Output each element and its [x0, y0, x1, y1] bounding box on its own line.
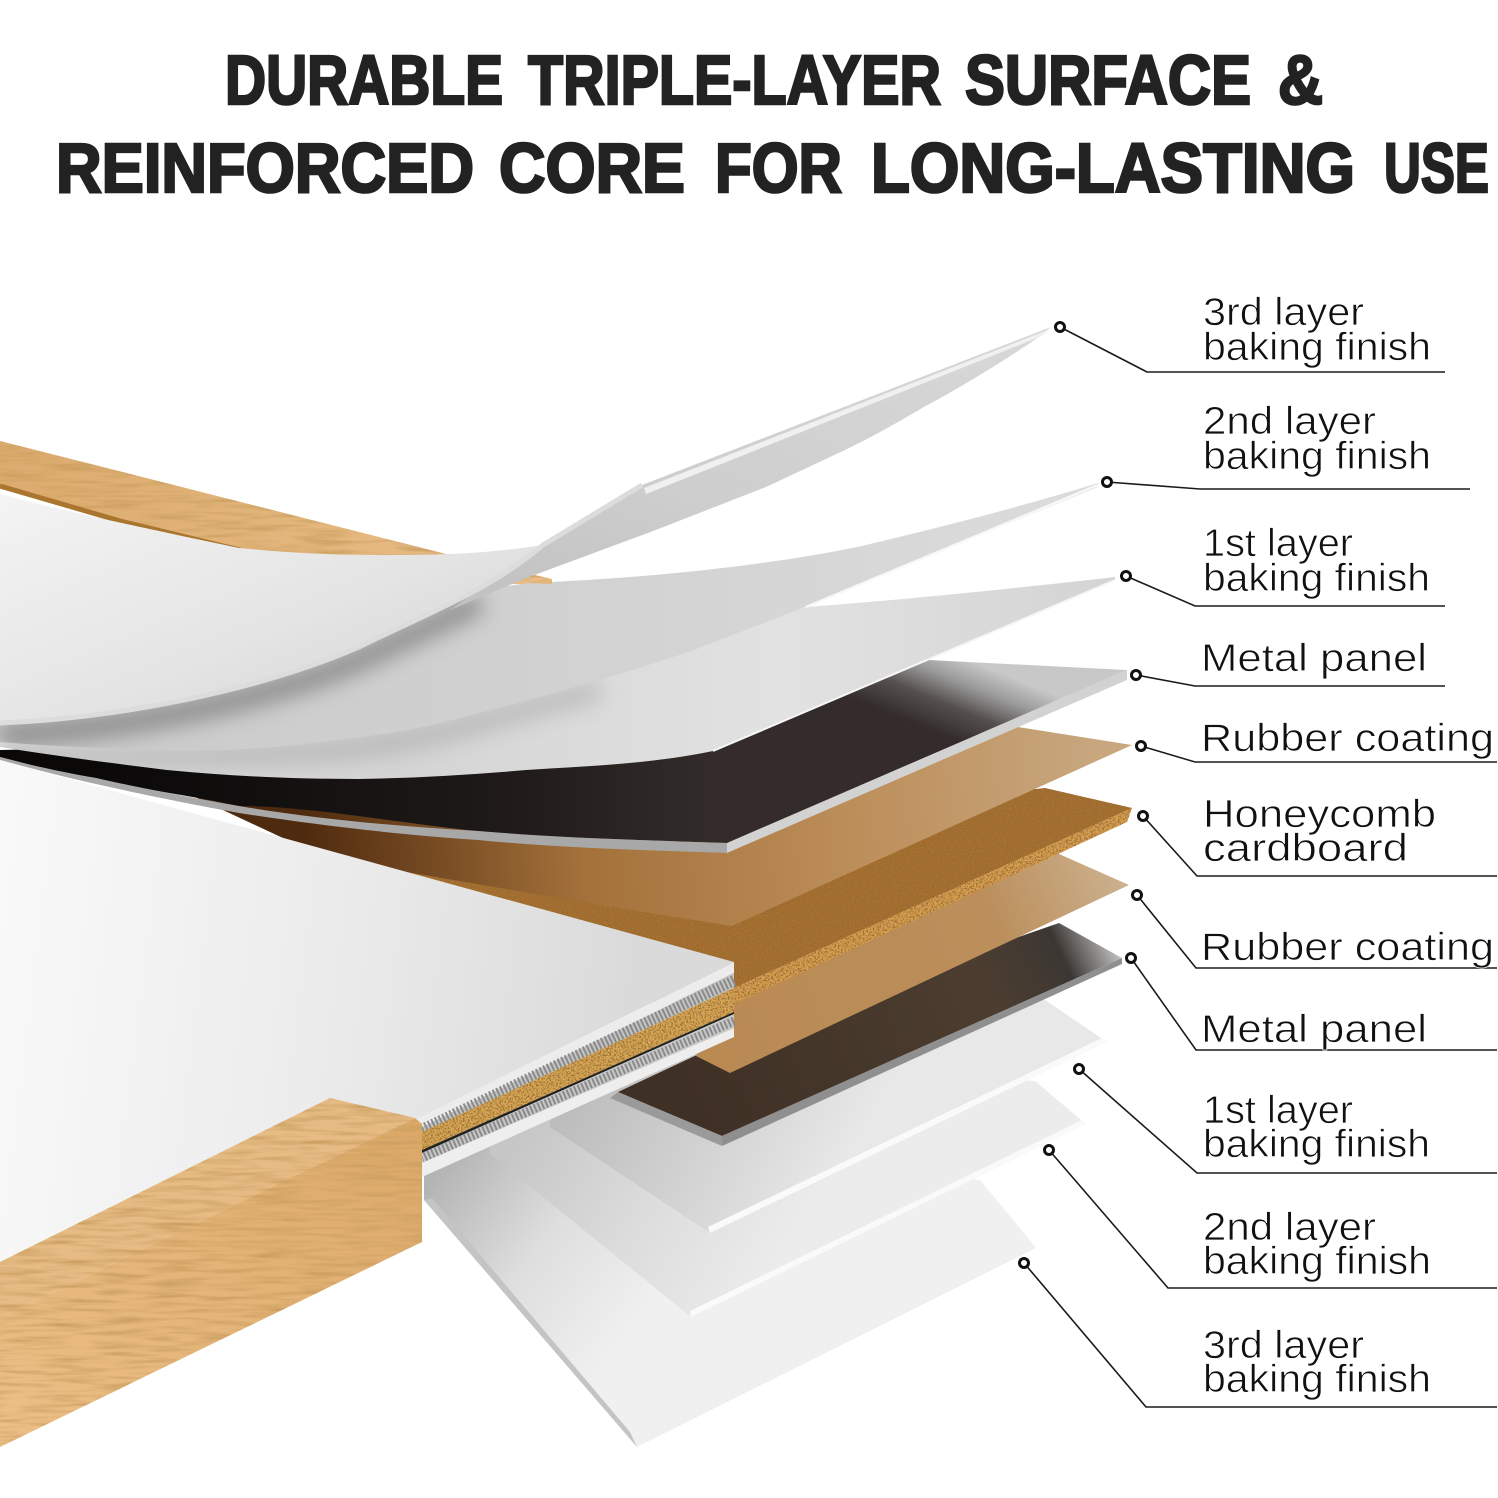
callout: lower 3rd layer baking finish	[1020, 1258, 1497, 1407]
wood frame: front rail	[0, 1098, 422, 1447]
callout: upper 3rd layer baking finish	[1056, 291, 1445, 372]
title: SURFACE	[965, 41, 1251, 119]
callout: honeycomb cardboard: Honeycomb	[1203, 793, 1436, 836]
sheet: lower rubber coating	[696, 850, 1129, 1073]
title: REINFORCED	[56, 129, 474, 207]
callout: lower 2nd layer baking finish: baking finish	[1203, 1240, 1431, 1283]
callout: upper 2nd layer baking finish: 2nd layer	[1203, 400, 1376, 443]
callout: upper 3rd layer baking finish: baking finish	[1203, 326, 1431, 369]
callout: lower 1st layer baking finish	[1074, 1064, 1497, 1173]
callout: lower metal panel	[1126, 954, 1497, 1051]
sheet: lower 3rd layer baking finish	[424, 1080, 1036, 1447]
title: FOR	[715, 129, 842, 207]
sheet: upper 1st layer baking finish	[0, 577, 1115, 779]
sheet: upper rubber coating	[180, 727, 1132, 926]
sheet: upper metal panel	[0, 660, 1127, 853]
callout: honeycomb cardboard	[1138, 793, 1497, 876]
callout: lower 1st layer baking finish: 1st layer	[1203, 1089, 1353, 1132]
sheet: honeycomb cardboard core	[383, 788, 1132, 1004]
callout: upper rubber coating: Rubber coating	[1201, 717, 1494, 760]
callout: upper metal panel: Metal panel	[1201, 637, 1427, 680]
sheet: lower 1st layer baking finish	[550, 1000, 1107, 1233]
callout: upper 2nd layer baking finish	[1102, 400, 1470, 489]
callout: upper metal panel	[1132, 637, 1445, 686]
sheet: lower 2nd layer baking finish	[490, 1060, 1086, 1317]
sheet: lower metal panel	[610, 923, 1122, 1146]
title: DURABLE	[225, 41, 503, 119]
callout: upper 3rd layer baking finish: 3rd layer	[1203, 291, 1364, 334]
sheet: upper 3rd layer baking finish	[0, 327, 1051, 723]
title: LONG-LASTING	[871, 129, 1355, 207]
callout: lower rubber coating	[1132, 890, 1497, 969]
wood frame: back rail	[0, 441, 552, 584]
callout: upper 1st layer baking finish: baking finish	[1203, 557, 1430, 600]
callout: honeycomb cardboard: cardboard	[1203, 827, 1408, 870]
title: CORE	[499, 129, 685, 207]
callout: lower 1st layer baking finish: baking finish	[1203, 1123, 1430, 1166]
title: TRIPLE-LAYER	[528, 41, 941, 119]
wood tab behind sheets	[527, 578, 552, 584]
callout: lower metal panel: Metal panel	[1201, 1008, 1427, 1051]
title	[56, 41, 1489, 207]
callout: lower rubber coating: Rubber coating	[1201, 926, 1494, 969]
callout: lower 3rd layer baking finish: 3rd layer	[1203, 1324, 1364, 1367]
title: &	[1278, 41, 1323, 119]
callout: upper 1st layer baking finish: 1st layer	[1203, 522, 1353, 565]
assembled board: white top face	[0, 760, 734, 1262]
layered panel illustration	[0, 327, 1132, 1447]
callout: lower 3rd layer baking finish: baking finish	[1203, 1358, 1431, 1401]
assembled board: layered edge	[415, 962, 734, 1177]
callout: lower 2nd layer baking finish	[1044, 1146, 1497, 1288]
callout: lower 2nd layer baking finish: 2nd layer	[1203, 1206, 1376, 1249]
sheet: upper 2nd layer baking finish	[0, 483, 1098, 751]
callout: upper 2nd layer baking finish: baking finish	[1203, 435, 1431, 478]
callout: upper 1st layer baking finish	[1122, 522, 1445, 606]
